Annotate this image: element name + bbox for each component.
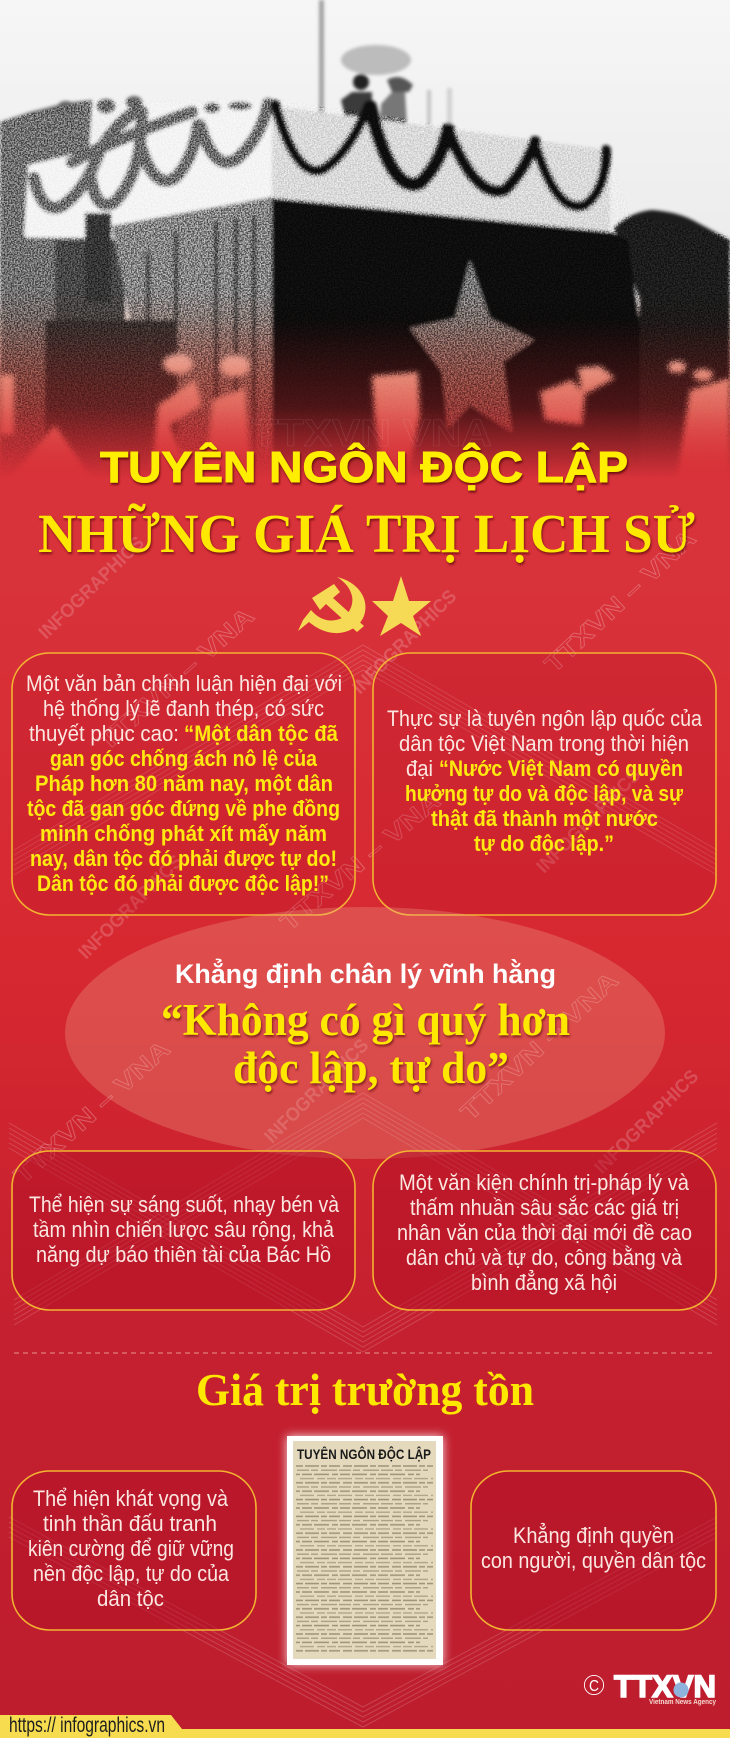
callout ellipse: eternal truth: “Không có gì quý hơn	[161, 995, 570, 1045]
panel: modern political argument: minh chống phát xít mấy năm	[40, 821, 327, 846]
agency watermarks: INFOGRAPHICS	[349, 586, 461, 699]
footer bar with website link: https:// infographics.vn	[9, 1714, 165, 1737]
callout ellipse: eternal truth: Khẳng định chân lý vĩnh hằng	[175, 957, 556, 989]
panel: national founding declaration: dân tộc Việt Nam trong thời hiện	[399, 731, 689, 756]
panel: strategic vision of Uncle Ho	[12, 1151, 355, 1310]
film grain	[0, 98, 730, 464]
agency watermarks: INFOGRAPHICS	[261, 1035, 373, 1148]
panel: aspiration and fighting spirit	[12, 1471, 256, 1630]
panel: aspiration and fighting spirit: nền độc lập, tự do của	[33, 1561, 229, 1586]
panel: modern political argument	[12, 653, 355, 915]
panel: national founding declaration	[373, 653, 716, 915]
stage left face	[24, 100, 272, 238]
agency watermarks: TTXVN – VNA	[276, 787, 446, 937]
panel: political and legal document: nhân văn của thời đại mới đề cao	[397, 1220, 692, 1245]
panel: strategic vision of Uncle Ho: năng dự báo thiên tài của Bác Hồ	[36, 1242, 331, 1267]
agency watermarks: TTXVN – VNA	[93, 603, 260, 756]
agency watermarks: TTXVN – VNA	[540, 525, 701, 678]
panel: aspiration and fighting spirit: kiên cường để giữ vững	[28, 1536, 234, 1561]
agency watermarks: INFOGRAPHICS	[75, 851, 187, 964]
stage right face	[272, 106, 610, 232]
logo: TTXVN copyright: C	[589, 1678, 599, 1695]
panel: modern political argument: tộc đã gan góc đứng về phe đồng	[27, 796, 340, 821]
panel: strategic vision of Uncle Ho: tầm nhìn chiến lược sâu rộng, khả	[33, 1217, 334, 1242]
speakers on stage	[353, 74, 369, 90]
title: Tuyên ngôn Độc lập: TUYÊN NGÔN ĐỘC LẬP	[100, 441, 628, 492]
subtitle: Những giá trị lịch sử: NHỮNG GIÁ TRỊ LỊCH SỬ	[38, 503, 695, 564]
agency watermarks: INFOGRAPHICS	[35, 533, 149, 644]
black garlands, right	[275, 105, 606, 206]
panel: political and legal document: thấm nhuần sâu sắc các giá trị	[410, 1195, 679, 1220]
panel: modern political argument: gan góc chống ách nô lệ của	[50, 746, 317, 771]
panel: human and national rights: con người, quyền dân tộc	[481, 1548, 706, 1573]
panel: modern political argument: thuyết phục cao:	[29, 721, 179, 746]
dashed divider	[14, 1352, 716, 1354]
logo: TTXVN copyright: Vietnam News Agency	[649, 1699, 716, 1706]
decorative line chevrons	[9, 645, 717, 1727]
image: printed declaration document	[287, 1436, 443, 1665]
agency watermarks	[9, 525, 703, 1189]
left foliage	[0, 98, 94, 473]
panel: national founding declaration: thật đã thành một nước	[431, 806, 658, 831]
faint horizontal agency watermark: TTXVN VNA	[252, 413, 492, 455]
panel: national founding declaration: đại	[406, 756, 433, 781]
left curtain	[112, 197, 272, 490]
agency watermarks: INFOGRAPHICS	[533, 765, 645, 878]
umbrella	[341, 45, 411, 75]
panel: aspiration and fighting spirit: dân tộc	[97, 1586, 164, 1611]
panel: modern political argument: nay, dân tộc đó phải được tự do!	[30, 846, 337, 871]
panel: aspiration and fighting spirit: Thể hiện khát vọng và	[33, 1486, 228, 1511]
gray garlands, left	[34, 104, 268, 208]
black curtain	[272, 198, 640, 490]
tree on the right	[614, 210, 730, 490]
panel: national founding declaration: tự do độc lập.”	[474, 831, 614, 856]
panel: national founding declaration: “Nước Việt Nam có quyền	[439, 756, 683, 781]
panel: political and legal document: dân chủ và tự do, công bằng và	[406, 1245, 682, 1270]
flagpole	[319, 0, 324, 114]
crowd in white	[0, 354, 730, 490]
panel: political and legal document	[373, 1151, 716, 1310]
agency watermarks: INFOGRAPHICS	[591, 1066, 703, 1179]
panel: human and national rights	[471, 1471, 716, 1630]
footer bar with website link	[0, 1714, 730, 1738]
agency watermarks: TTXVN – VNA	[9, 1036, 176, 1189]
panel: modern political argument: Pháp hơn 80 năm nay, một dân	[35, 771, 333, 796]
panel: modern political argument: Một văn bản chính luận hiện đại với	[26, 671, 342, 696]
icon: hammer, sickle and star emblem	[298, 576, 431, 636]
image: printed declaration document: TUYÊN NGÔN ĐỘC LẬP	[297, 1445, 431, 1462]
heading: enduring value: Giá trị trường tồn	[196, 1365, 534, 1415]
panel: modern political argument: “Một dân tộc đã	[184, 721, 338, 746]
logo: TTXVN copyright: TTXVN	[614, 1668, 716, 1704]
panel: aspiration and fighting spirit: tinh thần đấu tranh	[43, 1511, 217, 1536]
archive photo: Declaration of Independence ceremony	[0, 0, 730, 490]
panel: national founding declaration: hưởng tự do và độc lập, và sự	[405, 781, 684, 806]
panel: political and legal document: bình đẳng xã hội	[471, 1270, 617, 1295]
panel: modern political argument: hệ thống lý lẽ đanh thép, có sức	[43, 696, 324, 721]
star on the curtain	[410, 260, 534, 432]
panel: modern political argument: Dân tộc đó phải được độc lập!”	[37, 871, 329, 896]
panel: strategic vision of Uncle Ho: Thể hiện sự sáng suốt, nhạy bén và	[29, 1192, 339, 1217]
agency watermarks: TTXVN – VNA	[456, 967, 624, 1126]
panel: political and legal document: Một văn kiện chính trị-pháp lý và	[399, 1170, 689, 1195]
callout ellipse: eternal truth: độc lập, tự do”	[233, 1043, 509, 1093]
red tint	[0, 297, 730, 474]
panel: human and national rights: Khẳng định quyền	[513, 1523, 674, 1548]
callout ellipse: eternal truth	[65, 907, 665, 1159]
